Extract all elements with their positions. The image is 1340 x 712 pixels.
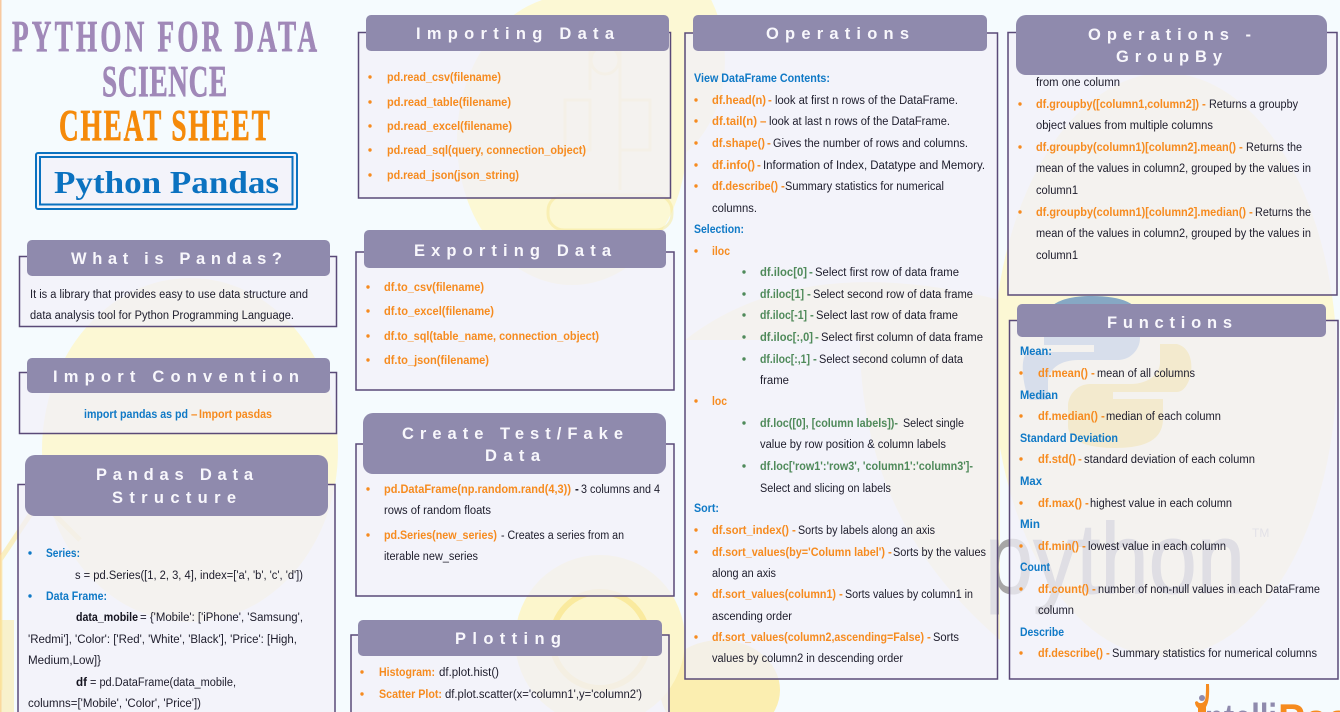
heading: Pandas Data Structure: Pandas Data — [96, 466, 254, 484]
section: sort: - — [839, 589, 843, 601]
section: sort: along an axis — [712, 568, 776, 580]
section: selection: Select first column of data frame — [821, 332, 983, 344]
icon: python logo watermark: TM — [1252, 526, 1269, 540]
heading: Functions: Functions — [1107, 314, 1232, 332]
text: series and data frame code: Series: — [46, 548, 80, 560]
section: selection: Select and slicing on labels — [760, 483, 891, 495]
section: selection: df.loc([0], [column labels])- — [760, 418, 898, 430]
list: groupby functions: - — [1249, 207, 1253, 219]
logo: Intellipaat — [1195, 684, 1340, 712]
list: plot functions: Scatter Plot: — [379, 689, 442, 701]
list: test data functions: - — [575, 484, 579, 496]
section: view DataFrame contents: View DataFrame Contents: — [694, 73, 830, 85]
heading: Exporting Data — [364, 230, 666, 268]
section: selection: - — [815, 332, 819, 344]
title: CHEAT SHEET — [59, 100, 270, 150]
list: export functions: df.to_excel(filename) — [384, 306, 494, 318]
section: selection: loc — [712, 396, 728, 408]
list: read functions: pd.read_sql(query, connection_object) — [387, 145, 586, 157]
section: selection: - — [810, 310, 814, 322]
list: statistical functions: - — [1078, 454, 1082, 466]
text: series and data frame code: columns=['Mobile', 'Color', 'Price']) — [28, 698, 201, 710]
section: view DataFrame contents: Information of Index, Datatype and Memory. — [763, 160, 985, 172]
list: statistical functions: number of non-null values in each DataFrame — [1098, 584, 1320, 596]
list: groupby functions: Returns a groupby — [1209, 99, 1298, 111]
list: read functions — [368, 72, 586, 182]
section: selection: Select first row of data frame — [815, 267, 959, 279]
text: series and data frame code: Medium,Low]} — [28, 655, 101, 667]
list: statistical functions — [1019, 346, 1320, 660]
heading: Importing Data — [366, 15, 669, 51]
section: view DataFrame contents: Gives the number of rows and columns. — [773, 138, 968, 150]
list: groupby functions: column1 — [1036, 185, 1078, 197]
list: statistical functions: Min — [1020, 519, 1040, 531]
list: statistical functions: Mean: — [1020, 346, 1052, 358]
section: selection: Select last row of data frame — [816, 310, 958, 322]
panel: Pandas Data Structure — [18, 455, 335, 712]
list: groupby functions: from one column — [1036, 77, 1120, 89]
list: statistical functions: df.std() — [1038, 454, 1076, 466]
list: test data functions: rows of random floats — [384, 505, 491, 517]
list: plot functions: Histogram: — [379, 667, 435, 679]
icon: python logo watermark — [985, 296, 1269, 615]
list: read functions: pd.read_json(json_string) — [387, 170, 519, 182]
list: statistical functions: - — [1091, 368, 1095, 380]
section: view DataFrame contents: df.tail(n) — [712, 116, 757, 128]
heading: What is Pandas — [27, 240, 330, 276]
section: selection: Select single — [903, 418, 964, 430]
heading: Create Test/Fake Data: Data — [485, 447, 541, 465]
list: groupby functions: df.groupby([column1,column2]) — [1036, 99, 1199, 111]
section: sort: df.sort_values(column2,ascending=False) — [712, 632, 924, 644]
text: import statement: Import pasdas — [199, 409, 272, 421]
list: groupby functions: df.groupby(column1)[column2].median() — [1036, 207, 1246, 219]
text: import statement — [84, 409, 272, 421]
text: pandas description: data analysis tool for Python Programming Language. — [30, 310, 294, 322]
list: plot functions: df.plot.hist() — [439, 667, 499, 679]
heading: Pandas Data Structure — [25, 455, 328, 516]
section: sort: Sort: — [694, 503, 719, 515]
text: import statement: import pandas as pd — [84, 409, 188, 421]
panel: Functions — [1010, 304, 1338, 679]
section: selection: Selection: — [694, 224, 744, 236]
heading: Operations: Operations — [766, 25, 909, 43]
subtitle badge: Python Pandas — [36, 153, 297, 209]
heading: Importing Data: Importing Data — [416, 25, 615, 43]
heading: Exporting Data: Exporting Data — [414, 242, 612, 260]
section: selection: Select second column of data — [819, 354, 964, 366]
heading: What is Pandas: What is Pandas? — [71, 250, 282, 268]
section: sort: Sorts by labels along an axis — [798, 525, 935, 537]
list: groupby functions — [1018, 77, 1311, 262]
section: selection: - — [809, 267, 813, 279]
list: statistical functions: lowest value in each column — [1088, 541, 1226, 553]
section: selection: df.iloc[:,0] — [760, 332, 813, 344]
list: test data functions: - Creates a series from an — [501, 530, 624, 542]
icon: python logo watermark: python — [985, 503, 1245, 615]
list: test data functions: 3 columns and 4 — [581, 484, 661, 496]
text: series and data frame code: 'Redmi'], 'Color': ['Red', 'White', 'Black'], 'Price': [High, — [28, 634, 297, 646]
list: statistical functions: df.describe() — [1038, 648, 1103, 660]
heading: Create Test/Fake Data — [363, 413, 666, 474]
list: statistical functions: - — [1085, 498, 1089, 510]
list: plot functions: df.plot.scatter(x='column1',y='column2') — [445, 689, 642, 701]
section: view DataFrame contents: df.describe() — [712, 181, 778, 193]
section: view DataFrame contents: df.shape() — [712, 138, 765, 150]
list: statistical functions: - — [1082, 541, 1086, 553]
section: sort: - — [888, 547, 892, 559]
list: groupby functions: - — [1202, 99, 1206, 111]
list: statistical functions: df.min() — [1038, 541, 1079, 553]
section: sort: df.sort_values(by='Column label') — [712, 547, 885, 559]
list: export functions — [366, 282, 599, 367]
list: read functions: pd.read_excel(filename) — [387, 121, 512, 133]
section: selection — [694, 224, 983, 495]
section: sort: - — [927, 632, 931, 644]
list: test data functions: iterable new_series — [384, 551, 478, 563]
panel: Operations GroupBy — [1008, 15, 1337, 295]
panel: Exporting Data — [356, 230, 674, 390]
list: statistical functions: Standard Deviation — [1020, 433, 1118, 445]
section: sort: Sorts — [933, 632, 959, 644]
list: groupby functions: - — [1239, 142, 1243, 154]
section: selection: df.iloc[:,1] — [760, 354, 810, 366]
list: statistical functions: df.median() — [1038, 411, 1098, 423]
list: statistical functions: column — [1038, 605, 1074, 617]
list: statistical functions: df.mean() — [1038, 368, 1088, 380]
section: selection: df.loc['row1':'row3', 'column1':'column3']- — [760, 461, 973, 473]
text: import statement: – — [191, 409, 198, 421]
section: sort: ascending order — [712, 611, 792, 623]
text: series and data frame code: = {'Mobile': ['iPhone', 'Samsung', — [140, 612, 303, 624]
heading: Plotting — [358, 620, 662, 656]
title: PYTHON FOR DATA — [12, 11, 317, 61]
list: export functions: df.to_csv(filename) — [384, 282, 484, 294]
section: sort: - — [792, 525, 796, 537]
list: groupby functions: column1 — [1036, 250, 1078, 262]
panel: Importing Data — [358, 15, 670, 198]
list: groupby functions: object values from multiple columns — [1036, 120, 1213, 132]
section: selection: - — [807, 289, 811, 301]
section: view DataFrame contents: - — [768, 95, 772, 107]
section: view DataFrame contents: df.info() — [712, 160, 755, 172]
list: read functions: pd.read_csv(filename) — [387, 72, 501, 84]
section: view DataFrame contents: - — [781, 181, 785, 193]
list: export functions: df.to_json(filename) — [384, 355, 489, 367]
text: series and data frame code: data_mobile — [76, 612, 138, 624]
heading: Functions — [1017, 304, 1326, 337]
list: statistical functions: df.count() — [1038, 584, 1089, 596]
list: statistical functions: - — [1106, 648, 1110, 660]
section: selection: value by row position & column labels — [760, 439, 946, 451]
title — [12, 11, 317, 150]
section: view DataFrame contents: Summary statistics for numerical — [785, 181, 944, 193]
list: statistical functions: mean of all columns — [1097, 368, 1195, 380]
text: series and data frame code: df — [76, 677, 87, 689]
panel: Import Convention — [20, 358, 336, 434]
text: series and data frame code: s = pd.Series([1, 2, 3, 4], index=['a', 'b', 'c', 'd']) — [75, 570, 303, 582]
list: statistical functions: - — [1092, 584, 1096, 596]
section: view DataFrame contents: - — [767, 138, 771, 150]
section: selection: frame — [760, 375, 789, 387]
panel: Create Test/Fake Data — [356, 413, 674, 596]
list: statistical functions: standard deviation of each column — [1084, 454, 1255, 466]
list: read functions: pd.read_table(filename) — [387, 97, 511, 109]
panel: What is Pandas — [20, 240, 336, 326]
panel: Operations — [685, 15, 998, 679]
list: groupby functions: mean of the values in column2, grouped by the values in — [1036, 228, 1311, 240]
list: export functions: df.to_sql(table_name, connection_object) — [384, 331, 599, 343]
list: statistical functions: Median — [1020, 390, 1058, 402]
list: groupby functions: mean of the values in column2, grouped by the values in — [1036, 163, 1311, 175]
section: selection: iloc — [712, 246, 731, 258]
section: sort: df.sort_values(column1) — [712, 589, 836, 601]
section: selection: Select second row of data frame — [813, 289, 973, 301]
section: sort: df.sort_index() — [712, 525, 789, 537]
list: statistical functions: df.max() — [1038, 498, 1082, 510]
section: view DataFrame contents: columns. — [712, 203, 757, 215]
list: groupby functions: df.groupby(column1)[column2].mean() — [1036, 142, 1236, 154]
text: pandas description — [30, 289, 308, 322]
list: groupby functions: Returns the — [1255, 207, 1311, 219]
subtitle badge: Python Pandas: Python Pandas — [54, 164, 279, 200]
section: view DataFrame contents: look at first n rows of the DataFrame. — [775, 95, 958, 107]
text: series and data frame code — [28, 548, 303, 710]
heading: Pandas Data Structure: Structure — [112, 489, 236, 507]
heading: Operations GroupBy — [1016, 15, 1327, 75]
list: statistical functions: - — [1101, 411, 1105, 423]
list: statistical functions: Max — [1020, 476, 1043, 488]
title: SCIENCE — [102, 56, 227, 106]
heading: Create Test/Fake Data: Create Test/Fake — [402, 425, 623, 443]
section: sort: Sorts by the values — [893, 547, 986, 559]
list: statistical functions: Summary statistics for numerical columns — [1112, 648, 1317, 660]
list: statistical functions: median of each column — [1106, 411, 1221, 423]
section: view DataFrame contents: df.head(n) — [712, 95, 766, 107]
list: test data functions — [366, 484, 661, 563]
list: test data functions: pd.DataFrame(np.random.rand(4,3)) — [384, 484, 571, 496]
text: series and data frame code: = pd.DataFrame(data_mobile, — [90, 677, 236, 689]
heading: Import Convention — [27, 358, 330, 393]
section: sort — [694, 503, 986, 665]
section: view DataFrame contents: - — [757, 160, 761, 172]
text: pandas description: It is a library that provides easy to use data structure and — [30, 289, 308, 301]
section: view DataFrame contents: look at last n rows of the DataFrame. — [769, 116, 950, 128]
heading: Plotting: Plotting — [455, 630, 561, 648]
section: view DataFrame contents: – — [760, 116, 767, 128]
list: groupby functions: Returns the — [1246, 142, 1302, 154]
section: selection: df.iloc[-1] — [760, 310, 807, 322]
section: sort: values by column2 in descending order — [712, 653, 903, 665]
text: series and data frame code: Data Frame: — [46, 591, 107, 603]
heading: Operations GroupBy: GroupBy — [1116, 48, 1223, 66]
section: selection: - — [813, 354, 817, 366]
heading: Operations GroupBy: Operations - — [1088, 26, 1251, 44]
section: view DataFrame contents — [694, 73, 985, 215]
list: statistical functions: Count — [1020, 562, 1050, 574]
panel: Plotting — [351, 620, 669, 712]
heading: Import Convention: Import Convention — [53, 368, 299, 386]
list: test data functions: pd.Series(new_series) — [384, 530, 497, 542]
list: statistical functions: Describe — [1020, 627, 1064, 639]
list: plot functions — [360, 667, 642, 701]
section: selection: df.iloc[1] — [760, 289, 804, 301]
heading: Operations — [693, 15, 987, 51]
section: selection: df.iloc[0] — [760, 267, 807, 279]
list: statistical functions: highest value in each column — [1090, 498, 1232, 510]
section: sort: Sorts values by column1 in — [845, 589, 973, 601]
